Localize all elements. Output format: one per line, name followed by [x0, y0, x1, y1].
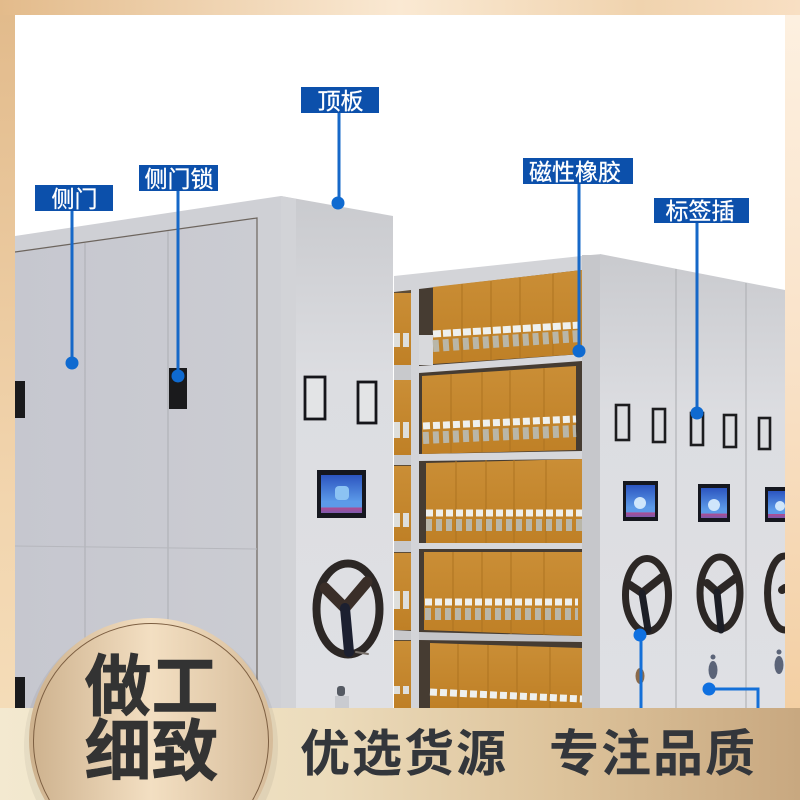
side door lock left	[15, 381, 25, 418]
books: row 2	[394, 366, 576, 455]
books: row 5	[394, 641, 582, 708]
badge: 做工细致: 细致	[84, 715, 218, 790]
callout: 侧门: 侧门	[52, 186, 98, 212]
shelf boards	[394, 364, 411, 380]
books: row 3	[394, 459, 582, 543]
slogan: 专注品质: 专注品质	[549, 726, 757, 782]
callout: 顶板: 顶板	[318, 88, 364, 114]
slogan: 优选货源: 优选货源	[300, 726, 508, 782]
lock on left cabinet side	[335, 686, 349, 708]
touch screen on left cabinet	[317, 470, 366, 518]
books: row 4	[394, 552, 582, 636]
cabinet door face	[15, 196, 281, 708]
locks on right unit	[636, 650, 784, 684]
panel: left cabinet	[15, 196, 393, 708]
callout: 侧门	[35, 185, 113, 370]
books: row 1	[394, 270, 582, 365]
callout: 侧门锁	[139, 165, 218, 382]
unit side panels	[582, 255, 600, 708]
callout line: hand wheel	[634, 628, 646, 708]
frame: top border	[0, 0, 800, 15]
frame: right border	[785, 15, 800, 708]
badge: 做工细致	[24, 618, 278, 800]
callout: 标签插	[654, 198, 749, 420]
touch screens on right unit	[623, 481, 785, 522]
callout: 磁性橡胶: 磁性橡胶	[529, 159, 621, 185]
callout: 标签插: 标签插	[666, 198, 734, 224]
callout: 侧门锁: 侧门锁	[144, 166, 214, 192]
door panel with top edge	[15, 218, 257, 708]
cabinet side face	[281, 196, 393, 708]
callout: 磁性橡胶	[523, 158, 633, 358]
callout: 顶板	[301, 87, 379, 210]
hand wheels on right unit	[626, 556, 785, 632]
handles on left cabinet	[305, 377, 376, 423]
bottom band	[0, 708, 800, 800]
handles on right unit	[616, 405, 770, 449]
callout line: lock	[702, 682, 758, 708]
badge: 做工细致: 做工	[84, 650, 218, 725]
shelf bay frame	[394, 254, 600, 708]
panel: right mobile shelving unit	[394, 254, 785, 708]
lower left lock	[15, 677, 25, 708]
side door lock	[169, 368, 187, 409]
hand wheel on left cabinet	[316, 564, 380, 654]
frame: left border	[0, 15, 15, 708]
